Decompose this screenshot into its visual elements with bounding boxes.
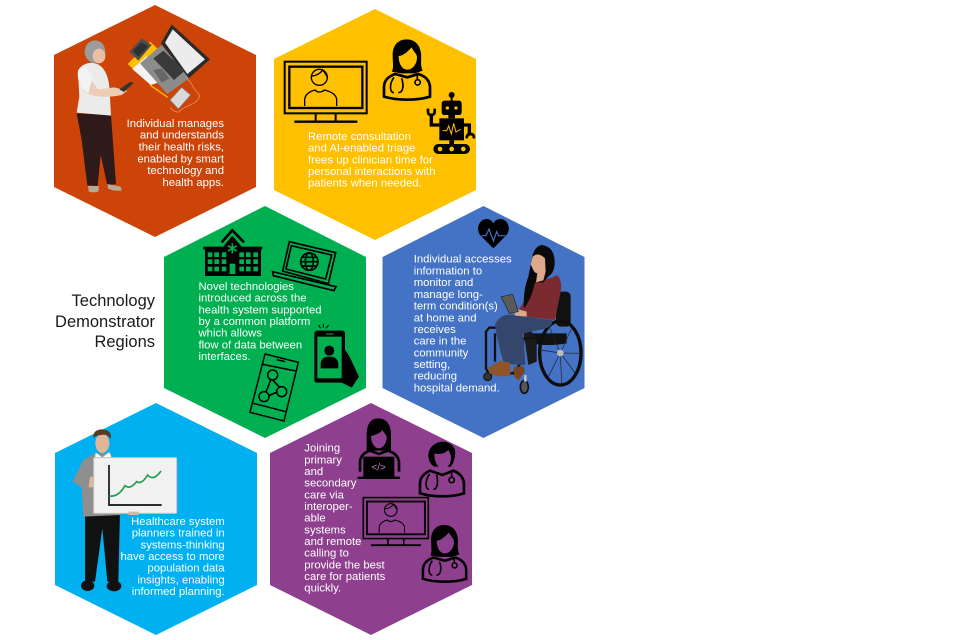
icon: robot [428, 92, 474, 154]
text block [198, 281, 322, 363]
text block: by a common platform [198, 316, 310, 328]
panel: healthcare system planners [55, 403, 257, 635]
text block: and AI-enabled triage [308, 143, 415, 155]
icon: video consultation monitor [285, 62, 367, 122]
text block: introduced across the [198, 293, 307, 305]
icon: hospital [203, 230, 262, 276]
icon: clinician short hair [420, 442, 464, 496]
text block: Healthcare system [131, 516, 225, 528]
illustration: laptop and desk items [128, 24, 210, 112]
text block: Individual accesses [414, 254, 512, 266]
text block: term condition(s) [414, 301, 498, 313]
text block: setting, [414, 359, 450, 371]
text block: have access to more [120, 551, 225, 563]
text block: and [304, 466, 323, 478]
text block: Individual manages [127, 118, 224, 130]
text block: interfaces. [198, 351, 251, 363]
text block: insights, enabling [137, 574, 225, 586]
text block: Joining [304, 443, 340, 455]
text block: and understands [140, 130, 224, 142]
text block: population data [147, 563, 225, 575]
text block: technology and [147, 165, 224, 177]
text block: systems-thinking [141, 539, 225, 551]
icon: clinician [384, 39, 430, 100]
icon: heart with pulse [478, 219, 509, 248]
text block: enabled by smart [137, 153, 225, 165]
text block: care in the [414, 336, 466, 348]
text block: calling to [304, 548, 349, 560]
text block: Remote consultation [308, 131, 411, 143]
panel: novel technologies [164, 206, 366, 438]
text block [304, 443, 386, 595]
text block: secondary [304, 478, 357, 490]
text block: Novel technologies [198, 281, 294, 293]
text block: manage long- [414, 289, 483, 301]
text block: systems [304, 524, 346, 536]
icon: phone with network [250, 354, 298, 421]
text block: quickly. [304, 583, 341, 595]
text block: receives [414, 324, 456, 336]
text block: reducing [414, 371, 457, 383]
text block: at home and [414, 312, 477, 324]
text block: able [304, 513, 326, 525]
text block: primary [304, 454, 342, 466]
panel: long-term conditions at home [382, 206, 584, 438]
text block [127, 118, 225, 189]
text block: health system supported [198, 304, 322, 316]
text block: planners trained in [132, 528, 225, 540]
icon: phone video call in hand [314, 324, 359, 388]
title [55, 292, 156, 351]
text block: informed planning. [132, 586, 225, 598]
text block: provide the best [304, 559, 386, 571]
text block: care via [304, 489, 345, 501]
icon: developer at laptop: </> [371, 463, 386, 474]
text block: community [414, 347, 469, 359]
text block: flow of data between [198, 339, 302, 351]
panel: remote consultation and AI triage [274, 9, 476, 240]
text block: which allows [198, 328, 262, 340]
text block: care for patients [304, 571, 386, 583]
icon: developer at laptop [358, 418, 400, 479]
text block: health apps. [162, 177, 224, 189]
title: Regions [94, 333, 155, 351]
text block: information to [414, 265, 482, 277]
icon: video consultation monitor [363, 498, 428, 545]
text block: frees up clinician time for [308, 154, 433, 166]
text block [308, 131, 435, 190]
text block: hospital demand. [414, 382, 500, 394]
text block: interoper- [304, 501, 353, 513]
text block: personal interactions with [308, 166, 435, 178]
title: Demonstrator [55, 313, 156, 331]
text block: patients when needed. [308, 178, 422, 190]
icon: clinician long hair [423, 525, 466, 582]
panel: individual manages health risks [54, 5, 256, 237]
text block [414, 254, 512, 394]
text block [120, 516, 225, 598]
text block: and remote [304, 536, 361, 548]
illustration: woman in wheelchair [484, 245, 581, 393]
title: Technology [72, 292, 156, 310]
illustration: woman with tablet [77, 40, 134, 192]
illustration: man holding chart board [73, 429, 177, 591]
icon: laptop with globe [273, 242, 336, 291]
text block: monitor and [414, 277, 473, 289]
text block: their health risks, [139, 142, 224, 154]
panel: joining primary and secondary care [270, 403, 472, 635]
